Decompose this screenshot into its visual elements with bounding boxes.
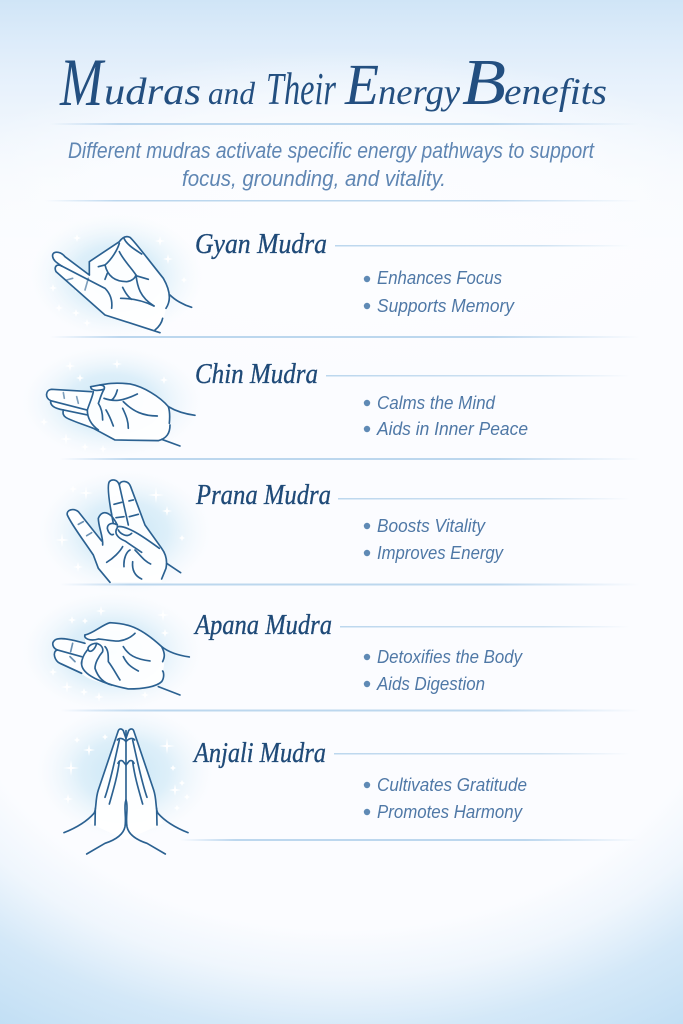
subtitle: Different mudras activate specific energy pathways to support (68, 138, 595, 163)
benefits: Apana Mudra: Aids Digestion (376, 674, 485, 694)
row: Prana Mudra (39, 470, 630, 594)
benefits: Apana Mudra: Detoxifies the Body (377, 647, 523, 667)
heading: Chin Mudra: Chin Mudra (195, 358, 318, 390)
subtitle: focus, grounding, and vitality. (182, 166, 446, 191)
heading: Prana Mudra: Prana Mudra (195, 479, 331, 511)
subtitle (68, 138, 595, 191)
title: and (208, 75, 256, 111)
benefits: Chin Mudra (364, 393, 528, 439)
benefits: Prana Mudra: Boosts Vitality (377, 516, 486, 536)
icon: Anjali Mudra hands (37, 706, 213, 854)
icon: Prana Mudra hand (39, 470, 211, 594)
icon: Apana Mudra hand (22, 592, 202, 712)
row: Gyan Mudra (30, 214, 630, 338)
icon: Gyan Mudra hand (30, 214, 202, 338)
heading: Apana Mudra: Apana Mudra (193, 609, 332, 641)
title: M (59, 44, 106, 120)
benefits: Chin Mudra: Aids in Inner Peace (376, 419, 528, 439)
row: Anjali Mudra (37, 706, 630, 854)
benefits: Apana Mudra (364, 647, 523, 694)
title: enefits (504, 72, 607, 113)
benefits: Gyan Mudra (364, 268, 515, 316)
title: B (462, 46, 506, 119)
title: nergy (378, 72, 460, 112)
benefits: Anjali Mudra (364, 775, 527, 822)
benefits: Prana Mudra (364, 516, 504, 563)
title: udras (104, 71, 201, 113)
title (59, 44, 607, 120)
benefits: Anjali Mudra: Cultivates Gratitude (377, 775, 527, 795)
heading: Anjali Mudra: Anjali Mudra (192, 737, 326, 769)
benefits: Prana Mudra: Improves Energy (377, 543, 504, 563)
row: Apana Mudra (22, 592, 630, 712)
icon: Chin Mudra hand (22, 346, 202, 458)
title: Their (266, 63, 337, 114)
benefits: Chin Mudra: Calms the Mind (377, 393, 496, 413)
benefits: Gyan Mudra: Enhances Focus (377, 268, 502, 288)
row: Chin Mudra (22, 346, 630, 458)
heading: Gyan Mudra: Gyan Mudra (195, 228, 327, 260)
benefits: Anjali Mudra: Promotes Harmony (377, 802, 523, 822)
benefits: Gyan Mudra: Supports Memory (377, 296, 515, 316)
title: E (344, 52, 379, 117)
